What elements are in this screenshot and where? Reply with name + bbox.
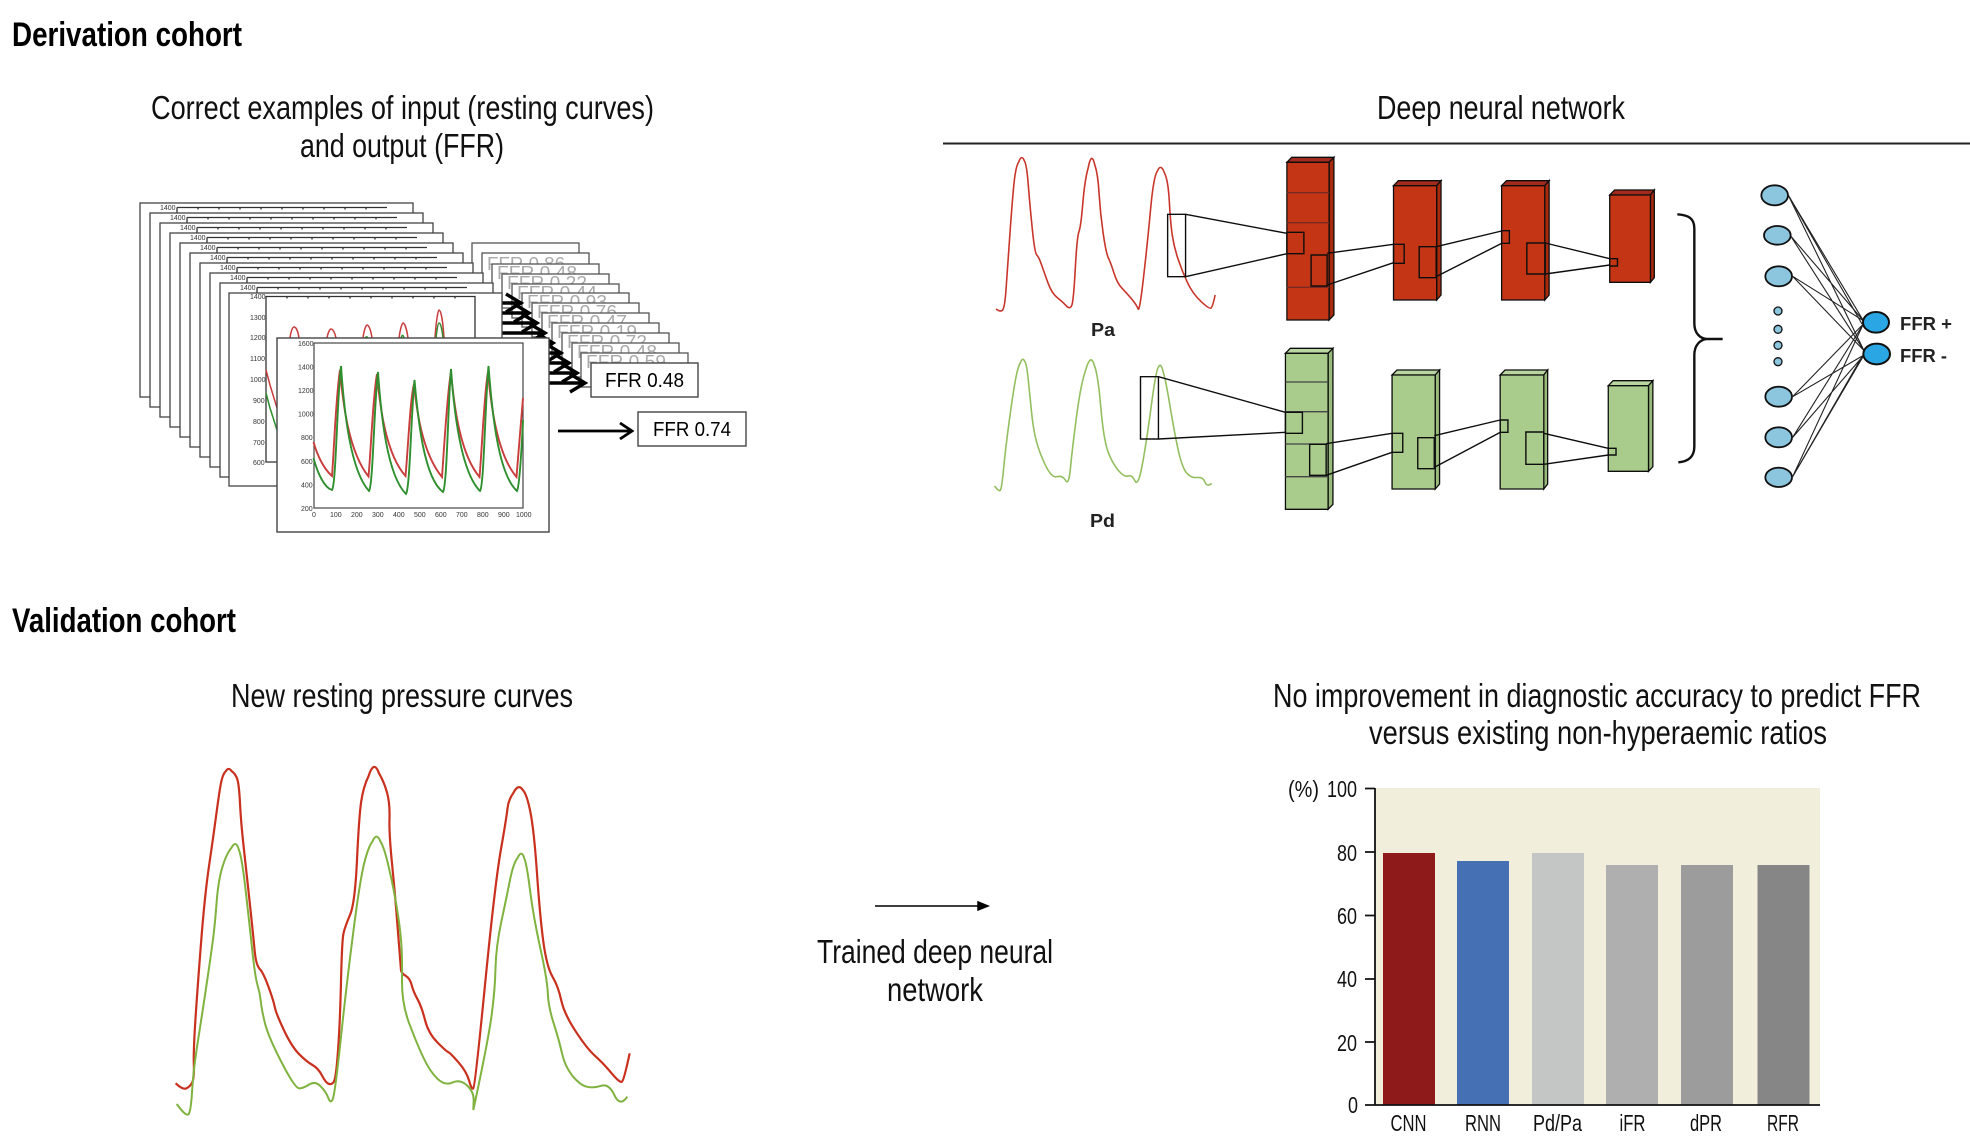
- front plot axis labels: 200: [301, 506, 313, 513]
- stacked FFR output boxes: FFR 0.48: [577, 342, 657, 362]
- front plot axis labels: 400: [393, 512, 405, 519]
- y axis labels: 100: [1327, 776, 1357, 802]
- small 1400 labels on the stacked frames: 800: [253, 419, 265, 426]
- small 1400 labels on the stacked frames: 1100: [250, 356, 265, 363]
- y axis labels: 40: [1337, 966, 1357, 992]
- title: no improvement in diagnostic accuracy: [1273, 677, 1921, 751]
- text: trained deep neural network: Trained deep neural: [817, 933, 1053, 970]
- x axis labels: CNN: [1390, 1110, 1426, 1136]
- small 1400 labels on the stacked frames: 1400: [230, 275, 246, 282]
- title: correct examples of input and output: Correct examples of input (resting curves): [151, 89, 654, 126]
- front plot axis labels: 400: [301, 482, 313, 490]
- front plot axis labels: 100: [330, 512, 342, 519]
- front plot red curve: [314, 370, 523, 477]
- small 1400 labels on the stacked frames: 1000: [250, 377, 266, 384]
- small 1400 labels on the stacked frames: 1300: [250, 315, 266, 322]
- arrow: curves to trained network: [875, 902, 988, 910]
- small 1400 labels on the stacked frames: 1400: [210, 255, 226, 262]
- front FFR 0.48 box: FFR 0.48: [605, 370, 684, 392]
- bar: iFR: [1606, 865, 1658, 1105]
- title: correct examples of input and output: and output (FFR): [300, 127, 504, 164]
- front plot axis labels: 800: [477, 512, 489, 519]
- small 1400 labels on the stacked frames: 900: [253, 398, 265, 405]
- green convolution blocks: [1285, 348, 1653, 509]
- bar: CNN: [1383, 853, 1435, 1105]
- axes and ticks: [1365, 788, 1820, 1105]
- Pa input curve: [996, 158, 1215, 311]
- stacked FFR output boxes: FFR 0.19: [557, 322, 637, 342]
- x axis labels: iFR: [1620, 1110, 1646, 1136]
- front plot axis labels: 1000: [298, 412, 314, 418]
- panel: convolutional network diagram: [995, 157, 1654, 509]
- label: FFR -: FFR -: [1900, 346, 1947, 366]
- input nodes: [1761, 185, 1792, 487]
- front plot axis labels: 1400: [298, 364, 314, 372]
- plot background: [1375, 788, 1820, 1105]
- stacked FFR output boxes: FFR 0.47: [547, 312, 627, 332]
- x axis labels: Pd/Pa: [1533, 1110, 1582, 1136]
- front plot axis labels: 700: [456, 512, 468, 519]
- y axis labels: 60: [1337, 903, 1357, 929]
- x axis labels: [1390, 1110, 1799, 1136]
- stacked FFR output boxes: FFR 0.86: [487, 254, 565, 274]
- red receptive field connectors: [1168, 214, 1617, 286]
- small 1400 labels on the stacked frames: 600: [253, 460, 265, 467]
- output nodes: [1863, 312, 1890, 364]
- front plot axis labels: 600: [435, 512, 447, 519]
- panel: stacked training examples: [140, 203, 746, 532]
- front plot axis labels: [298, 341, 532, 519]
- small 1400 labels on the stacked frames: 1400: [180, 225, 196, 232]
- x axis labels: dPR: [1690, 1110, 1722, 1136]
- heading: Validation cohort: Validation cohort: [12, 602, 236, 640]
- front plot green curve: [314, 366, 523, 494]
- arrow to FFR 0.74: [558, 423, 632, 439]
- green pressure curve: [177, 837, 627, 1115]
- small 1400 labels on the stacked frames: 1400: [190, 235, 206, 242]
- bar chart: diagnostic accuracy: [1288, 776, 1820, 1136]
- stacked FFR output boxes: FFR 0.72: [567, 332, 647, 352]
- panel: fully connected output layer: [1677, 185, 1890, 487]
- small 1400 labels on the stacked frames: 1200: [250, 335, 266, 342]
- y axis labels: 20: [1337, 1030, 1357, 1056]
- title: new resting pressure curves: New resting pressure curves: [231, 677, 573, 714]
- stacked FFR output boxes: FFR 0.44: [517, 283, 597, 303]
- network connections: [1788, 195, 1864, 477]
- front plot axis labels: 800: [301, 435, 313, 442]
- label: FFR +: FFR +: [1900, 314, 1952, 334]
- x axis labels: RNN: [1465, 1110, 1501, 1136]
- heading: Derivation cohort: Derivation cohort: [12, 16, 242, 54]
- stacked FFR output boxes: FFR 0.48: [497, 263, 577, 283]
- text: trained deep neural network: network: [887, 971, 983, 1008]
- small 1400 labels on the stacked frames: 1400: [220, 265, 236, 272]
- panel: new resting pressure curves chart: [176, 767, 630, 1115]
- red pressure curve: [176, 767, 630, 1089]
- y axis labels: (%): [1288, 776, 1319, 802]
- stacked arrows to FFR boxes: [480, 294, 585, 392]
- FFR 0.74 box: [638, 412, 746, 446]
- front plot axis labels: 0: [312, 512, 316, 519]
- small 1400 labels on the stacked frames: 1400: [200, 245, 216, 252]
- text: trained deep neural network: [817, 933, 1053, 1008]
- front plot axis labels: 600: [301, 459, 313, 466]
- front plot axis labels: 1200: [298, 388, 314, 395]
- green receptive field connectors: [1140, 377, 1616, 475]
- FFR 0.74 box: FFR 0.74: [653, 419, 731, 441]
- rear plot curves: [266, 310, 444, 430]
- small 1400 labels on the stacked frames: 1400: [170, 215, 186, 222]
- front plot frame: [277, 338, 549, 532]
- stacked FFR output boxes: FFR 0.59: [586, 352, 666, 372]
- divider line under deep neural network title: [943, 142, 1970, 144]
- title: no improvement in diagnostic accuracy: versus existing non-hyperaemic ratios: [1369, 714, 1827, 751]
- front plot axis labels: 1600: [298, 341, 314, 348]
- front plot axis labels: 1000: [516, 512, 532, 519]
- title: correct examples of input and output: [151, 89, 654, 164]
- red convolution blocks: [1287, 157, 1654, 320]
- small 1400 labels on the stacked frames: 700: [253, 440, 265, 447]
- label: Pd: Pd: [1090, 511, 1115, 531]
- front plot axis labels: 500: [414, 512, 426, 519]
- stacked FFR output boxes: FFR 0.22: [507, 273, 587, 293]
- small 1400 labels on the stacked frames: 1400: [240, 285, 256, 292]
- stacked FFR output boxes: [472, 243, 688, 387]
- label: Pa: Pa: [1091, 320, 1116, 340]
- title: deep neural network: Deep neural network: [1377, 89, 1625, 126]
- y axis labels: [1288, 776, 1358, 1118]
- stacked FFR output boxes: FFR 0.93: [527, 292, 607, 312]
- x axis labels: RFR: [1767, 1110, 1799, 1136]
- bar: Pd/Pa: [1532, 853, 1584, 1105]
- front plot axis labels: 300: [372, 512, 384, 519]
- bar: dPR: [1681, 865, 1733, 1105]
- front plot axis labels: 200: [351, 512, 363, 519]
- Pd input curve: [995, 359, 1212, 491]
- stacked plot frames: [140, 203, 502, 486]
- y axis labels: 0: [1348, 1092, 1358, 1118]
- small 1400 labels on the stacked frames: [160, 205, 266, 467]
- small 1400 labels on the stacked frames: 1400: [160, 205, 176, 212]
- small 1400 labels on the stacked frames: 1400: [250, 294, 266, 301]
- bar: RNN: [1457, 861, 1509, 1105]
- brace merging Pa and Pd streams: [1677, 214, 1723, 462]
- front plot axis labels: 900: [498, 512, 510, 519]
- y axis labels: 80: [1337, 840, 1357, 866]
- bar: RFR: [1758, 865, 1810, 1105]
- stacked FFR output boxes: FFR 0.76: [537, 302, 617, 322]
- front FFR 0.48 box: [591, 363, 698, 397]
